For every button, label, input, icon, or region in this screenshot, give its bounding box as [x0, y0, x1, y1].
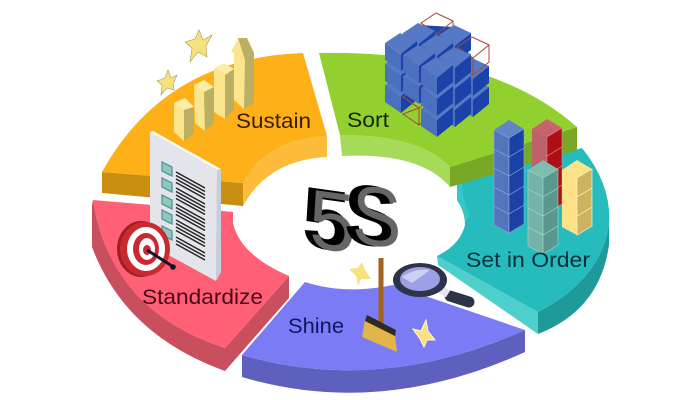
panel: sustain segment [102, 53, 327, 206]
icon: checklist paper [150, 131, 221, 281]
icon: sparkle left [349, 262, 371, 286]
icon: blue cube block [385, 13, 489, 137]
icon: magnifying glass [393, 263, 469, 302]
icon: sparkle right [413, 320, 435, 347]
title: 5S [303, 167, 401, 271]
icon: red stack [532, 119, 562, 213]
label: Shine: Shine [288, 315, 344, 338]
icon: blue stack [494, 120, 524, 233]
panel: sort segment [319, 53, 577, 187]
panel: shine segment [242, 282, 525, 393]
label: Set in Order: Set in Order [466, 249, 590, 272]
title: 5S: 5 [309, 171, 356, 271]
icon: yellow stack [562, 160, 592, 235]
icon: target with dart [117, 221, 176, 277]
panel: standardize segment [92, 200, 289, 371]
icon: star small [157, 70, 177, 95]
label: Sort: Sort [347, 109, 389, 132]
icon: star large [185, 30, 212, 62]
icon: rising bars with arrow [174, 38, 254, 141]
icon: teal stack [528, 160, 558, 254]
label: Sustain: Sustain [236, 110, 311, 133]
panel: set in order segment [437, 148, 609, 334]
title: 5S: 5 [303, 169, 350, 269]
title: 5S: S [352, 167, 401, 266]
icon: broom [362, 258, 397, 352]
title: 5S: S [345, 167, 397, 266]
label: Standardize: Standardize [142, 286, 263, 309]
